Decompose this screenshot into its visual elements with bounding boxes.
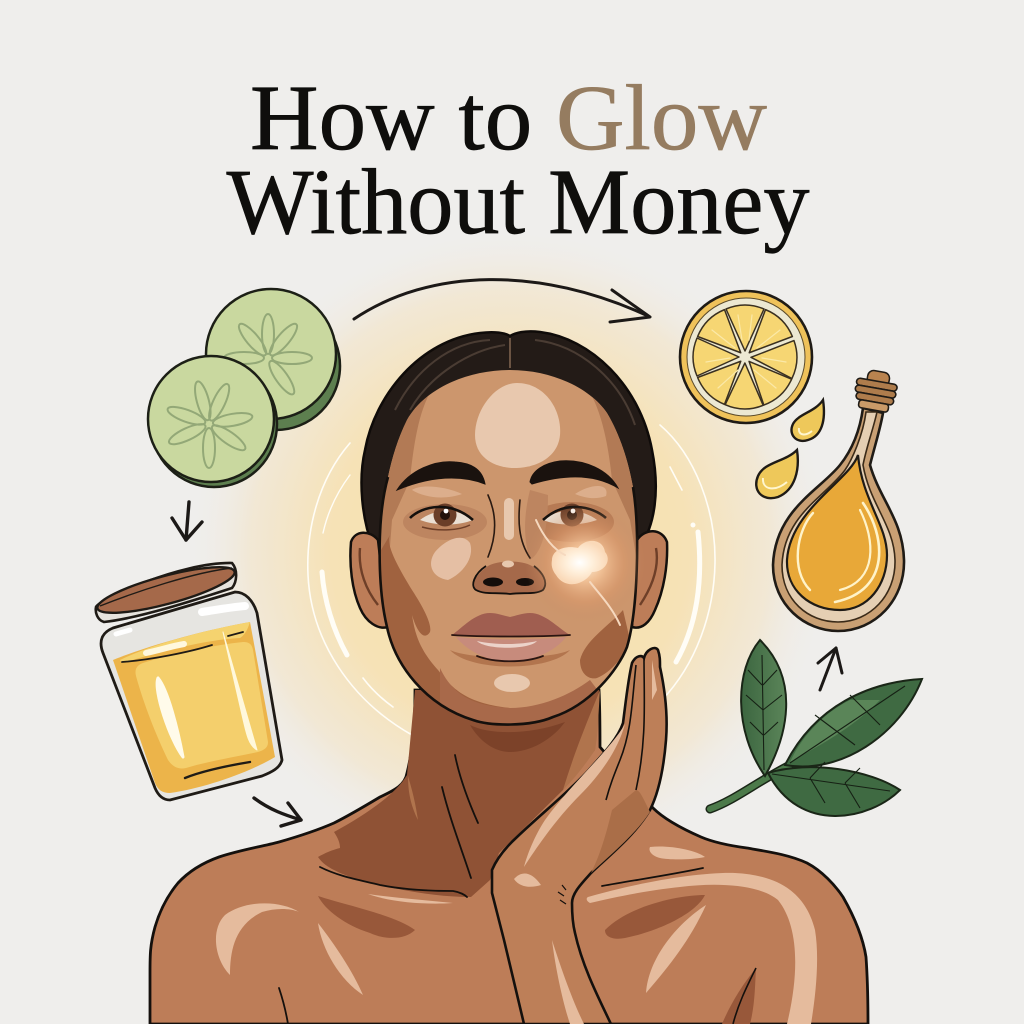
arm crease: [722, 968, 756, 1024]
front cucumber slice: [148, 356, 277, 487]
face: [380, 370, 637, 725]
arrow: top curved: [354, 280, 650, 322]
icon: lemon slice: [680, 291, 812, 423]
back cucumber slice: [206, 289, 340, 430]
lips: [452, 613, 570, 662]
arrow: leaves to bottle: [818, 648, 842, 690]
forehead highlight: [475, 383, 560, 468]
left ear: [350, 533, 388, 628]
jar glass: [101, 592, 282, 800]
shoulders and torso: [150, 690, 868, 1024]
arrow: cucumber to jar: [172, 502, 202, 540]
nose: [473, 495, 545, 594]
right eye: [543, 504, 606, 526]
title: Without Money: [226, 151, 810, 254]
icon: honey jar: [94, 558, 282, 800]
arrow: jar to person: [254, 798, 301, 826]
right ear: [632, 531, 667, 628]
chest highlights: [216, 847, 817, 1024]
background glow halo: [185, 225, 835, 875]
chest shadows: [318, 896, 415, 938]
cheek highlights: [431, 538, 471, 580]
icon: green leaves: [710, 640, 922, 816]
stem: [710, 765, 790, 809]
bottle liquid: [787, 455, 887, 610]
person: [150, 331, 868, 1024]
left leaf: [741, 640, 786, 776]
neck shadow: [318, 690, 599, 897]
eyebrows: [397, 462, 485, 490]
cheek contour shadows: [380, 396, 636, 724]
right leaf: [785, 679, 922, 767]
left eye: [410, 504, 473, 530]
jar highlights: [223, 632, 257, 750]
collarbone and neck lines: [279, 755, 703, 1024]
halo rings: [308, 425, 715, 735]
eye socket shadows: [403, 504, 487, 540]
icon: honey bottle: [773, 368, 904, 631]
jar liquid: [113, 622, 275, 793]
face outline: [380, 477, 637, 725]
bottom leaf: [768, 767, 900, 816]
jar lid: [94, 558, 238, 622]
cheek sparkle: [525, 503, 645, 625]
hand: [492, 648, 667, 1024]
head hair: [362, 331, 656, 547]
icon: cucumber slices: [148, 289, 340, 487]
liquid surface: [122, 632, 243, 662]
title: [226, 67, 810, 254]
bottle stopper: [852, 368, 899, 413]
icon: oil drops: [756, 400, 824, 498]
title: How to Glow: [250, 67, 767, 170]
infographic canvas: [94, 84, 924, 1024]
